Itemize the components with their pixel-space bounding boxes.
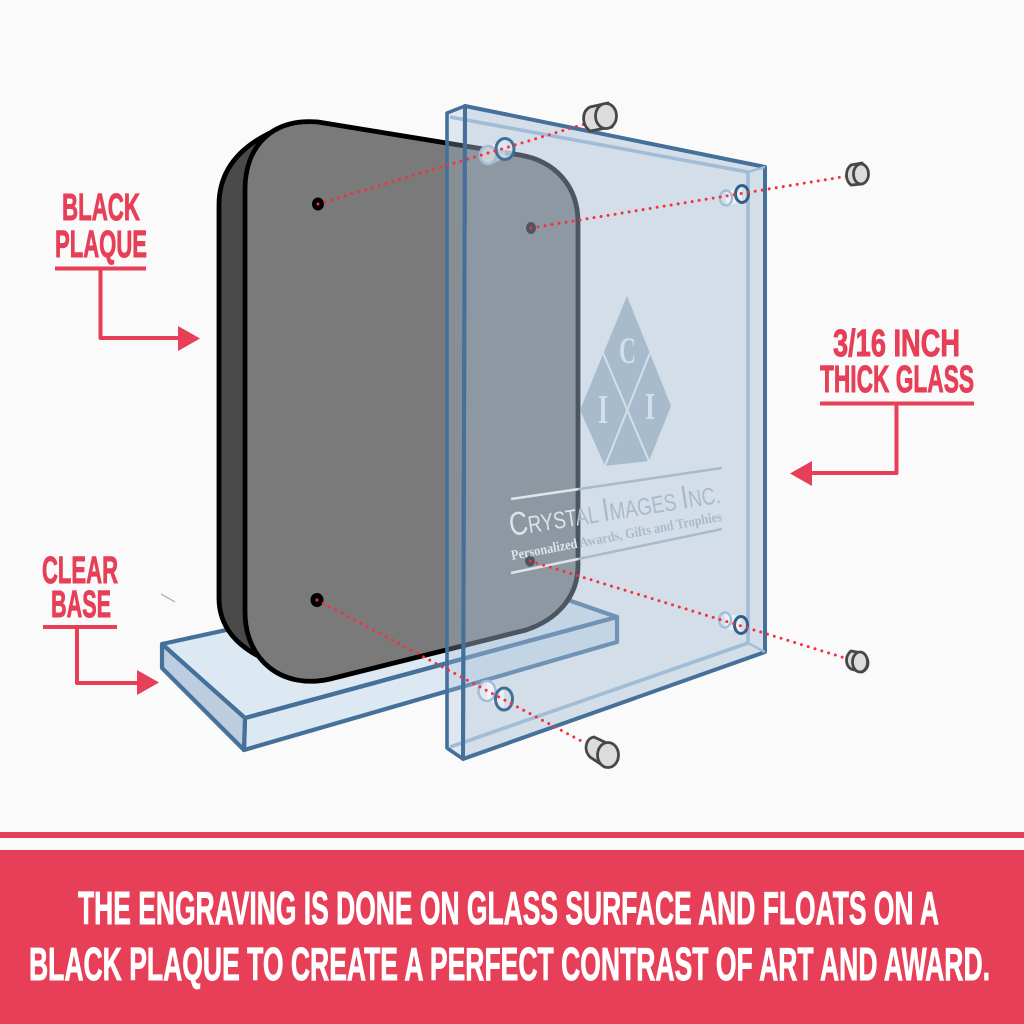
callout: clear base (42, 550, 159, 695)
arrow: to base (137, 670, 159, 695)
company name: CRYSTAL IMAGES INC. (506, 473, 722, 543)
glass side face (447, 106, 465, 759)
arrow: to plaque (178, 326, 200, 351)
plaque hole top left (312, 198, 324, 210)
base left face (162, 644, 245, 750)
clear base (162, 590, 617, 750)
footer stripe (0, 832, 1024, 838)
engraved rule bottom (511, 529, 722, 573)
glass inner bevel (450, 117, 748, 747)
base back edges (162, 600, 617, 718)
plaque front (245, 122, 578, 681)
callout: glass thickness: 3/16 INCH (833, 323, 960, 365)
black plaque (219, 122, 578, 681)
glass holes (478, 138, 748, 710)
glass panel (447, 106, 765, 759)
arrow: to glass (790, 461, 812, 486)
glass front left edge (463, 106, 465, 759)
glass front face (463, 106, 765, 759)
base top face (162, 590, 617, 718)
callout: black plaque: BLACK (62, 187, 140, 229)
callout: clear base: CLEAR (42, 550, 118, 592)
hole top right (720, 186, 748, 206)
plaque side (219, 130, 330, 680)
engraved logo: I (598, 386, 608, 432)
engraved logo (506, 296, 724, 573)
callout: glass thickness (790, 323, 974, 486)
callout: black plaque: PLAQUE (55, 224, 147, 266)
stray mark (161, 594, 175, 602)
callout: black plaque (55, 187, 200, 351)
hole bottom right (719, 612, 748, 634)
plaque hole bottom left (310, 593, 324, 607)
standoff pin right top (846, 163, 868, 185)
hole top left (480, 138, 514, 165)
standoff pin top (584, 103, 616, 131)
logo dividers (603, 353, 650, 466)
engraved logo: I (645, 386, 655, 428)
plaque hole top right (526, 222, 536, 234)
dotted guide lines (317, 124, 848, 743)
tagline: Personalized Awards, Gifts and Trophies (510, 510, 724, 564)
hole bottom left (478, 681, 512, 710)
footer text (29, 882, 990, 990)
callout: clear base: BASE (51, 584, 111, 626)
footer banner (0, 850, 1024, 1024)
logo diamond (580, 296, 671, 466)
plaque hole bottom right (525, 556, 535, 566)
base front face (244, 617, 617, 750)
engraved rule top (511, 468, 722, 499)
standoff pin bottom (586, 737, 618, 768)
logo letters: C (619, 331, 636, 372)
standoff pin right bottom (846, 651, 868, 672)
